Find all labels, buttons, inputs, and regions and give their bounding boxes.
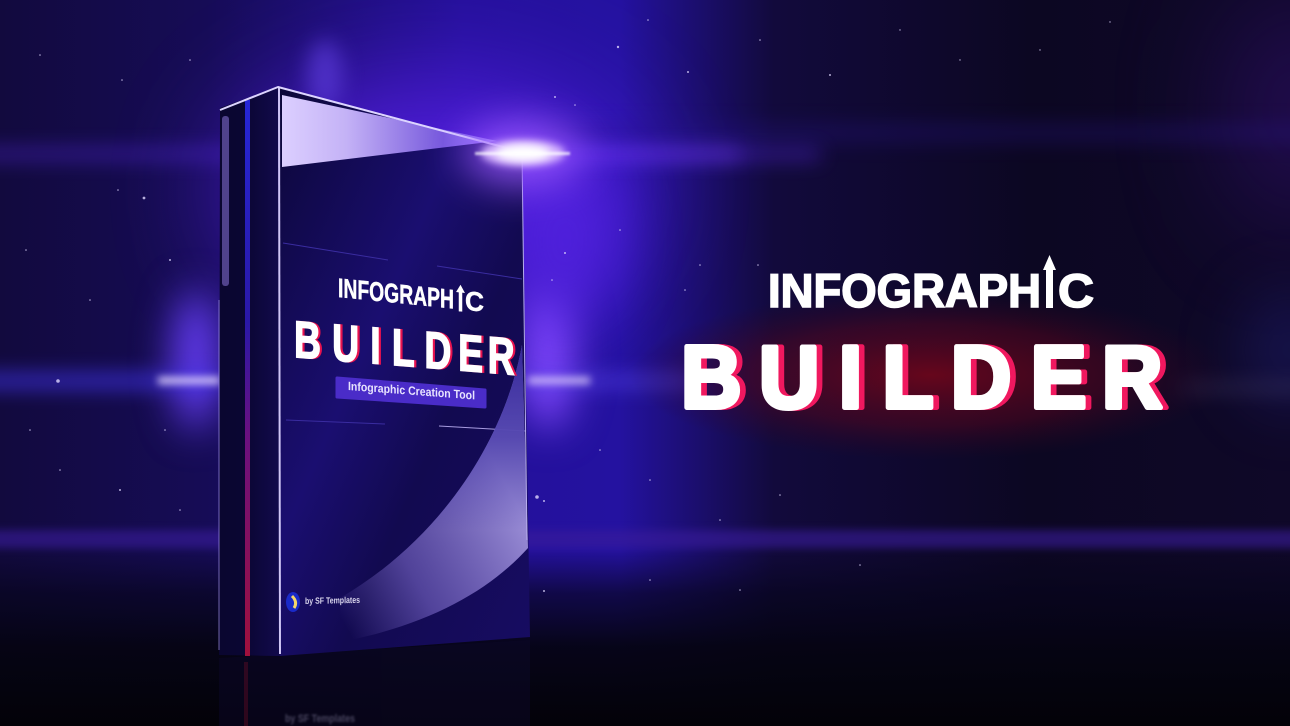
top glass reflection [282,95,497,167]
product box [219,87,530,726]
box spine [219,87,280,656]
arrow letter i [1043,255,1056,308]
box title: infographic: C [465,286,484,318]
lens flare at box corner [463,121,583,185]
box front face [280,88,530,656]
box subtitle badge: Infographic Creation Tool [348,379,475,403]
main title: infographic: INFOGRAPH [768,264,1041,317]
main title: infographic: C [1058,264,1094,317]
main title: builder: BUILDER [687,329,1168,427]
main title: builder: BUILDER [681,329,1162,427]
publisher logo [286,592,360,612]
box edges [220,87,527,654]
box title: builder: BUILDER [294,310,515,386]
box reflection on floor [219,640,530,726]
box title: infographic: INFOGRAPH [338,273,454,315]
red glow behind right title [630,290,1230,460]
box title: builder: BUILDER [296,310,517,386]
curved gloss reflection [340,345,528,642]
box reflection on floor: by SF Templates [285,713,355,725]
star field [25,19,1111,592]
publisher logo: by SF Templates [305,595,360,606]
light streaks [0,125,1290,391]
